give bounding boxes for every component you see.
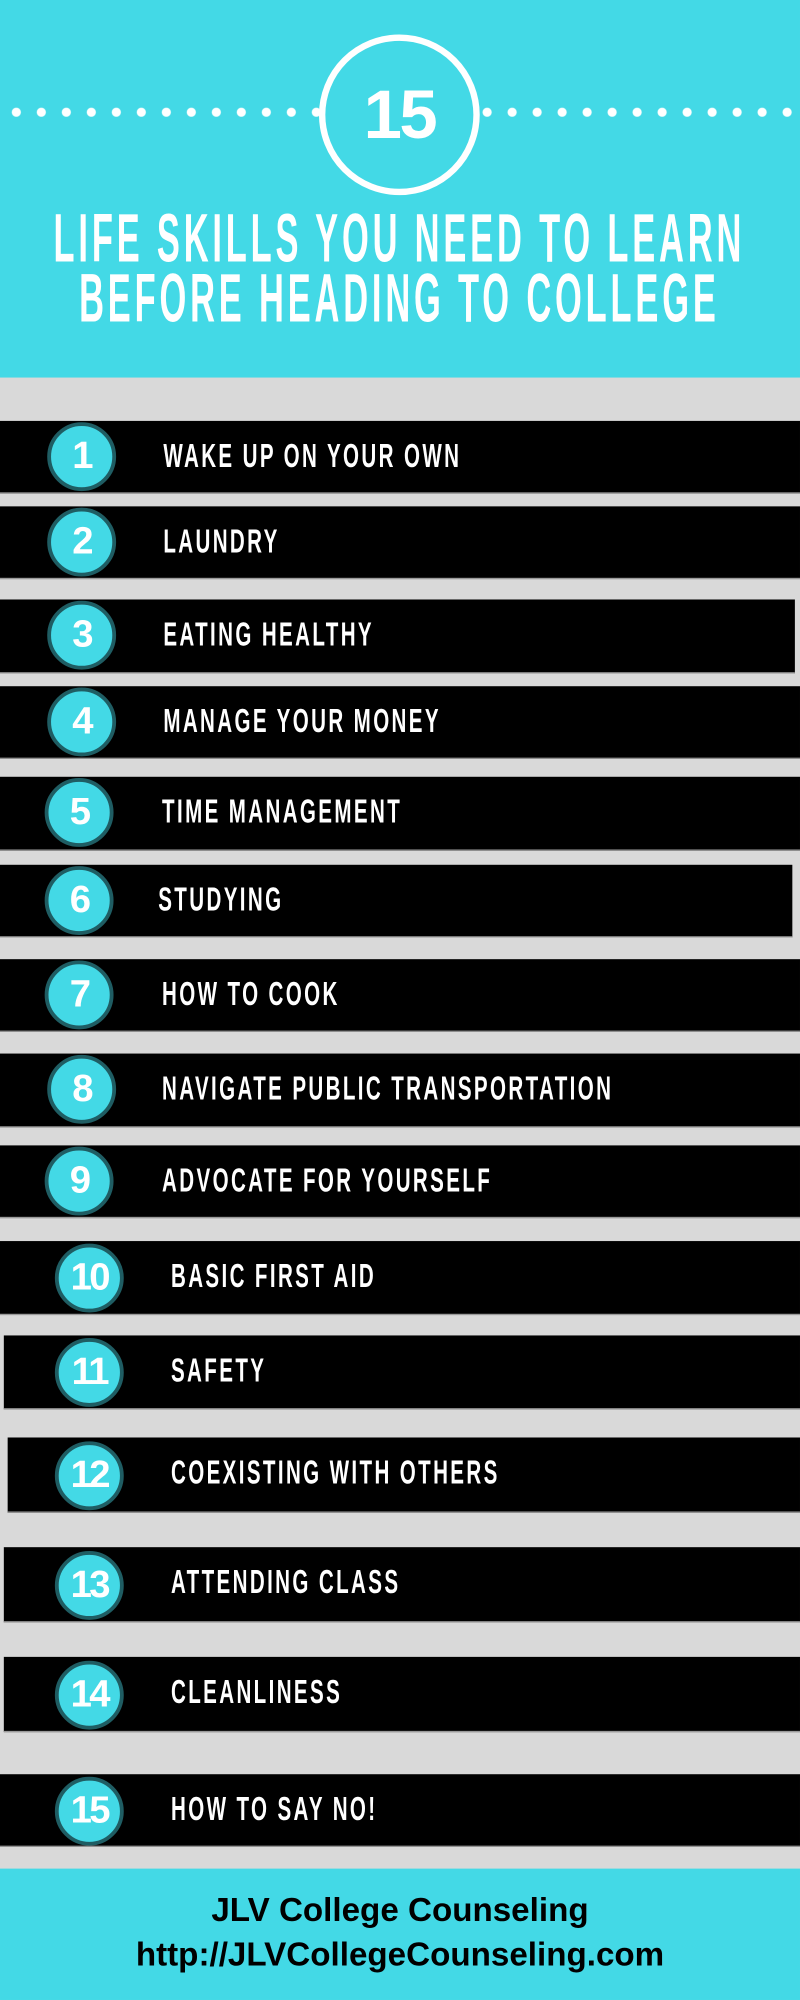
item 7	[0, 959, 800, 1032]
label 12: COEXISTING WITH OTHERS	[171, 1453, 500, 1491]
footer url: http://JLVCollegeCounseling.com	[136, 1935, 664, 1973]
item 8	[0, 1054, 800, 1128]
item 11	[4, 1335, 800, 1409]
number 3: 3	[72, 614, 91, 656]
number 14	[55, 1661, 124, 1730]
number 10	[55, 1244, 124, 1312]
number 11	[55, 1338, 124, 1407]
label 8: NAVIGATE PUBLIC TRANSPORTATION	[162, 1069, 613, 1107]
number 15	[55, 1777, 124, 1846]
number 13	[55, 1551, 124, 1620]
number 1: 1	[72, 435, 91, 477]
badge: 15: 15	[364, 77, 435, 153]
item 10	[0, 1241, 800, 1315]
item 9	[0, 1145, 800, 1218]
item 1	[0, 421, 800, 494]
number 13: 13	[71, 1564, 108, 1606]
number 15: 15	[71, 1790, 108, 1832]
label 4: MANAGE YOUR MONEY	[163, 702, 441, 740]
item 13	[4, 1547, 800, 1622]
item 12	[8, 1437, 800, 1513]
number 12: 12	[71, 1454, 108, 1496]
number 8	[47, 1055, 116, 1124]
item 14	[4, 1657, 800, 1732]
label 9: ADVOCATE FOR YOURSELF	[162, 1161, 492, 1199]
number 9: 9	[70, 1159, 88, 1202]
number 2	[47, 508, 116, 577]
item 3	[0, 599, 795, 673]
number 8: 8	[72, 1068, 91, 1110]
number 7: 7	[70, 973, 88, 1015]
title line 1: LIFE SKILLS YOU NEED TO LEARN	[54, 200, 745, 277]
label 7: HOW TO COOK	[162, 974, 340, 1013]
number 4	[47, 687, 116, 756]
item 6	[0, 865, 792, 937]
label 1: WAKE UP ON YOUR OWN	[163, 436, 461, 474]
dotted line left	[4, 107, 325, 117]
badge: 15	[319, 34, 480, 195]
label 13: ATTENDING CLASS	[171, 1562, 400, 1601]
label 5: TIME MANAGEMENT	[162, 792, 402, 830]
item 5	[0, 777, 800, 851]
label 2: LAUNDRY	[163, 522, 280, 560]
label 6: STUDYING	[158, 880, 283, 918]
number 11: 11	[72, 1351, 107, 1393]
number 1	[47, 422, 116, 491]
label 11: SAFETY	[171, 1351, 266, 1389]
number 2: 2	[72, 520, 91, 562]
number 10: 10	[71, 1256, 108, 1298]
label 14: CLEANLINESS	[171, 1672, 342, 1710]
label 15: HOW TO SAY NO!	[171, 1790, 378, 1828]
label 3: EATING HEALTHY	[163, 615, 374, 653]
number 7	[45, 960, 114, 1029]
item 4	[0, 686, 800, 759]
title line 2: BEFORE HEADING TO COLLEGE	[79, 260, 720, 337]
number 9	[45, 1147, 114, 1216]
number 3	[47, 601, 116, 670]
number 14: 14	[71, 1673, 108, 1716]
item 15	[0, 1774, 800, 1847]
number 6	[45, 866, 114, 935]
header panel	[0, 0, 800, 378]
number 5: 5	[70, 791, 88, 833]
number 5	[45, 778, 114, 847]
number 12	[55, 1441, 124, 1510]
item 2	[0, 506, 800, 579]
number 6: 6	[70, 879, 88, 921]
footer	[0, 1869, 800, 2000]
footer name: JLV College Counseling	[211, 1890, 589, 1929]
dotted line right	[475, 107, 800, 117]
label 10: BASIC FIRST AID	[171, 1256, 376, 1295]
number 4: 4	[72, 700, 91, 742]
